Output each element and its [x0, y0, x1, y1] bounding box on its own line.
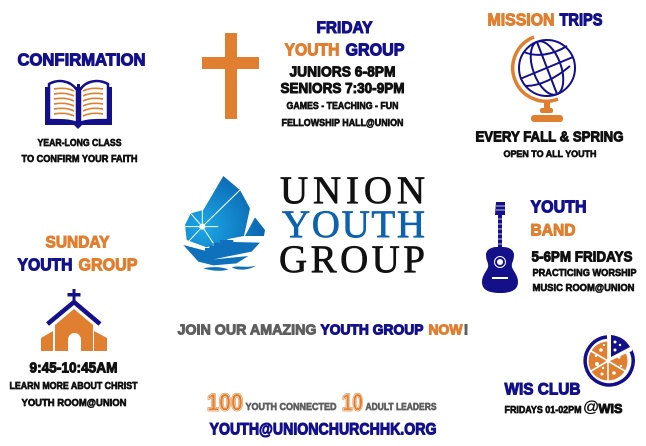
text: music room: MUSIC ROOM@UNION: [532, 283, 634, 294]
icon: open book: [45, 81, 112, 129]
banner: join our amazing youth group now: NOW: [428, 322, 463, 338]
heading: youth group: [18, 254, 138, 274]
panel: friday youth group: [202, 18, 405, 129]
heading: friday: FRIDAY: [316, 18, 373, 37]
panel: youth band: [482, 196, 637, 294]
number: 10 adult leaders: 10: [342, 390, 363, 416]
heading: youth group: YOUTH: [284, 40, 340, 60]
icon: orange cross: [202, 33, 259, 119]
heading: youth group: YOUTH: [18, 254, 72, 274]
text: year-long class: YEAR-LONG CLASS: [38, 138, 122, 149]
number: 100 youth connected: 100: [207, 390, 243, 416]
text: time: 5-6PM FRIDAYS: [532, 248, 632, 266]
text: every fall and spring: EVERY FALL & SPRING: [476, 128, 624, 146]
panel: mission trips: [476, 10, 624, 160]
text: at wis: [583, 399, 623, 416]
text: practicing worship: PRACTICING WORSHIP: [532, 268, 637, 279]
panel: statistics and contact: [207, 390, 437, 438]
heading: sunday: SUNDAY: [46, 232, 110, 252]
text: youth room: YOUTH ROOM@UNION: [22, 398, 126, 409]
heading: confirmation: CONFIRMATION: [18, 50, 146, 70]
heading: band: BAND: [530, 220, 576, 240]
text: seniors time: SENIORS 7:30-9PM: [280, 80, 404, 97]
number: 10 adult leaders: ADULT LEADERS: [366, 402, 437, 413]
logo text: youth: YOUTH: [282, 203, 425, 246]
heading: youth group: GROUP: [346, 40, 405, 60]
heading: mission trips: MISSION: [488, 10, 554, 30]
icon: junk boat: [183, 176, 265, 271]
banner: join our amazing youth group now: JOIN OUR AMAZING: [178, 322, 316, 338]
text: open to all youth: OPEN TO ALL YOUTH: [504, 149, 597, 160]
text: fellowship hall: FELLOWSHIP HALL@UNION: [282, 118, 404, 129]
number: 100 youth connected: 100: [207, 390, 243, 416]
heading: youth: YOUTH: [530, 196, 586, 216]
panel: confirmation: [18, 50, 146, 165]
heading: wis club: WIS CLUB: [504, 380, 580, 398]
icon: church: [41, 289, 107, 351]
text: games teaching fun: GAMES - TEACHING - FUN: [286, 101, 398, 112]
heading: mission trips: TRIPS: [560, 10, 602, 30]
icon: guitar: [482, 202, 518, 293]
icon: globe: [513, 37, 575, 122]
heading: youth group: GROUP: [78, 254, 138, 274]
heading: mission trips: [488, 10, 602, 30]
banner: join our amazing youth group now: !: [464, 322, 468, 338]
heading: youth group: [284, 40, 405, 60]
text: at wis: @: [583, 399, 599, 416]
text: juniors time: JUNIORS 6-8PM: [290, 64, 396, 80]
logo text: union: UNION: [280, 169, 425, 212]
panel: sunday youth group: [10, 232, 138, 409]
banner: join our amazing youth group now: YOUTH GROUP: [320, 322, 424, 338]
text: learn more: LEARN MORE ABOUT CHRIST: [10, 381, 138, 392]
number: 100 youth connected: YOUTH CONNECTED: [246, 402, 336, 413]
number: 10 adult leaders: 10: [342, 390, 363, 416]
text: time: 9:45-10:45AM: [30, 360, 118, 376]
banner: join our amazing youth group now: [178, 322, 468, 338]
number: 100 youth connected: [207, 390, 336, 416]
icon: pizza: [585, 335, 633, 385]
panel: wis club: [504, 335, 633, 416]
text: at wis: WIS: [598, 401, 623, 416]
text: fridays time: FRIDAYS 01-02PM: [504, 405, 582, 416]
text: to confirm your faith: TO CONFIRM YOUR FAITH: [22, 154, 138, 165]
text: email address: YOUTH@UNIONCHURCHHK.ORG: [210, 420, 436, 438]
number: 10 adult leaders: [342, 390, 437, 416]
logo text: group: GROUP: [279, 238, 425, 281]
logo: union youth group: [183, 169, 425, 281]
